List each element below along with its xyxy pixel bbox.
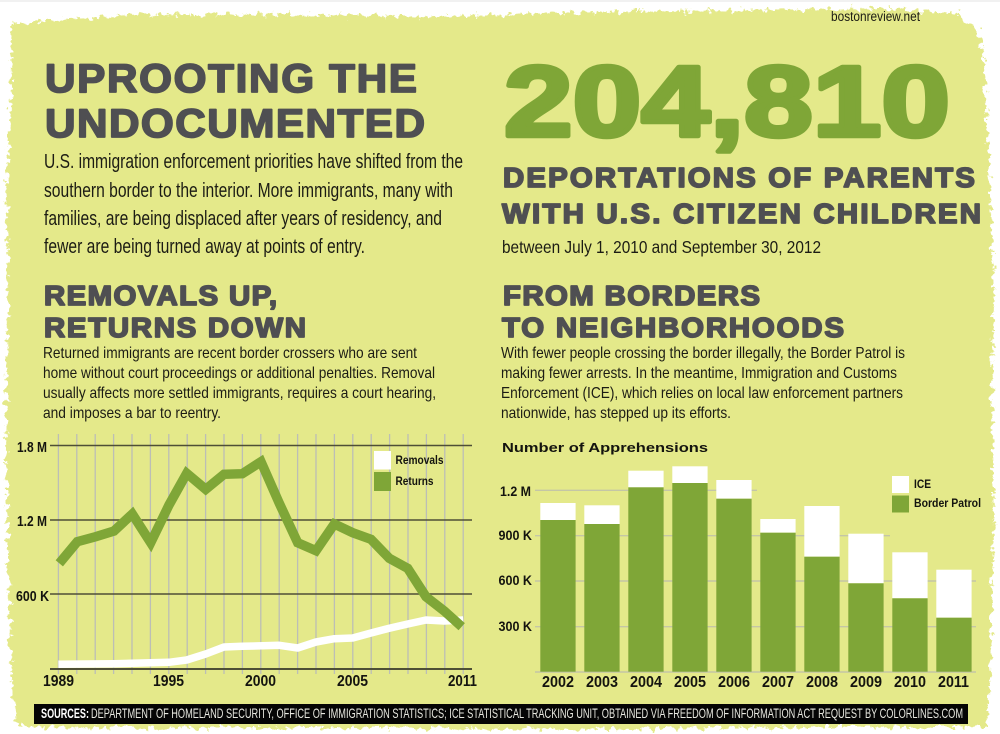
- y axis labels: [498, 483, 532, 634]
- heading: removals: RETURNS DOWN: [44, 313, 306, 344]
- heading: borders: [502, 281, 844, 344]
- intro text: U.S. immigration enforcement priorities have shifted from the: [44, 150, 463, 173]
- removals text: usually affects more settled immigrants, requires a court hearing,: [43, 385, 436, 402]
- removals text: home without court proceedings or additional penalties. Removal: [43, 365, 435, 382]
- x axis labels: 2010: [894, 674, 926, 691]
- intro text: families, are being displaced after years of residency, and: [44, 207, 442, 230]
- x axis labels: 2005: [674, 674, 706, 691]
- y axis labels: 300 K: [498, 618, 532, 634]
- chart title: Number of Apprehensions: [502, 440, 708, 455]
- y axis labels: 600 K: [16, 589, 49, 605]
- legend: [374, 451, 444, 491]
- y axis labels: [16, 440, 49, 605]
- heading: borders: FROM BORDERS: [503, 281, 760, 312]
- y axis labels: 600 K: [498, 572, 532, 588]
- y axis labels: 900 K: [498, 527, 532, 543]
- x axis labels: 2009: [850, 674, 882, 691]
- heading: removals: [44, 281, 306, 344]
- removals text: [43, 345, 436, 422]
- x axis labels: 2003: [586, 674, 618, 691]
- big number caption: WITH U.S. CITIZEN CHILDREN: [502, 199, 981, 230]
- x axis labels: 2011: [448, 673, 477, 690]
- x axis labels: 2005: [337, 673, 368, 690]
- removals text: and imposes a bar to reentry.: [43, 405, 221, 422]
- y axis labels: 1.2 M: [17, 514, 47, 530]
- date range: between July 1, 2010 and September 30, 2012: [502, 237, 821, 257]
- big number: 204,810: [504, 46, 950, 158]
- top rule: [0, 0, 1000, 2]
- x axis labels: [43, 673, 477, 690]
- x axis labels: 2002: [542, 674, 574, 691]
- borders text: nationwide, has stepped up its efforts.: [501, 405, 731, 422]
- borders text: making fewer arrests. In the meantime, Immigration and Customs: [501, 365, 897, 382]
- x axis labels: 2004: [630, 674, 662, 691]
- big number caption: [502, 163, 981, 230]
- y axis labels: 1.8 M: [17, 440, 47, 456]
- x axis labels: 2000: [245, 673, 276, 690]
- intro text: [44, 150, 463, 258]
- x axis labels: 2008: [806, 674, 838, 691]
- x axis labels: 2011: [938, 674, 969, 691]
- legend: [892, 476, 981, 512]
- bar chart: number of apprehensions: [498, 440, 981, 691]
- title: UNDOCUMENTED: [45, 101, 425, 146]
- legend: Border Patrol: [914, 498, 981, 510]
- line chart: removals and returns: [16, 434, 477, 690]
- legend: Returns: [396, 476, 434, 488]
- big number caption: DEPORTATIONS OF PARENTS: [503, 163, 975, 194]
- title: [45, 56, 425, 146]
- x axis labels: 1989: [43, 673, 74, 690]
- x axis labels: 2006: [718, 674, 750, 691]
- legend: ICE: [914, 479, 931, 491]
- heading: borders: TO NEIGHBORHOODS: [502, 313, 844, 344]
- x axis labels: 2007: [762, 674, 794, 691]
- x axis labels: 1995: [153, 673, 184, 690]
- legend: Removals: [396, 455, 444, 467]
- title: UPROOTING THE: [45, 56, 417, 101]
- borders text: With fewer people crossing the border illegally, the Border Patrol is: [501, 345, 905, 362]
- sources bar: SOURCES:: [41, 705, 89, 721]
- source credit: bostonreview.net: [831, 9, 920, 24]
- y axis labels: 1.2 M: [500, 483, 531, 499]
- intro text: fewer are being turned away at points of entry.: [44, 235, 365, 258]
- border patrol bars: [540, 483, 972, 672]
- borders text: Enforcement (ICE), which relies on local law enforcement partners: [501, 385, 903, 402]
- removals text: Returned immigrants are recent border crossers who are sent: [43, 345, 417, 362]
- series: returns: [59, 462, 462, 627]
- heading: removals: REMOVALS UP,: [44, 281, 277, 312]
- intro text: southern border to the interior. More immigrants, many with: [44, 179, 453, 202]
- series: removals: [58, 620, 463, 664]
- borders text: [501, 345, 905, 422]
- ICE bars: [540, 466, 972, 618]
- x axis labels: [542, 674, 969, 691]
